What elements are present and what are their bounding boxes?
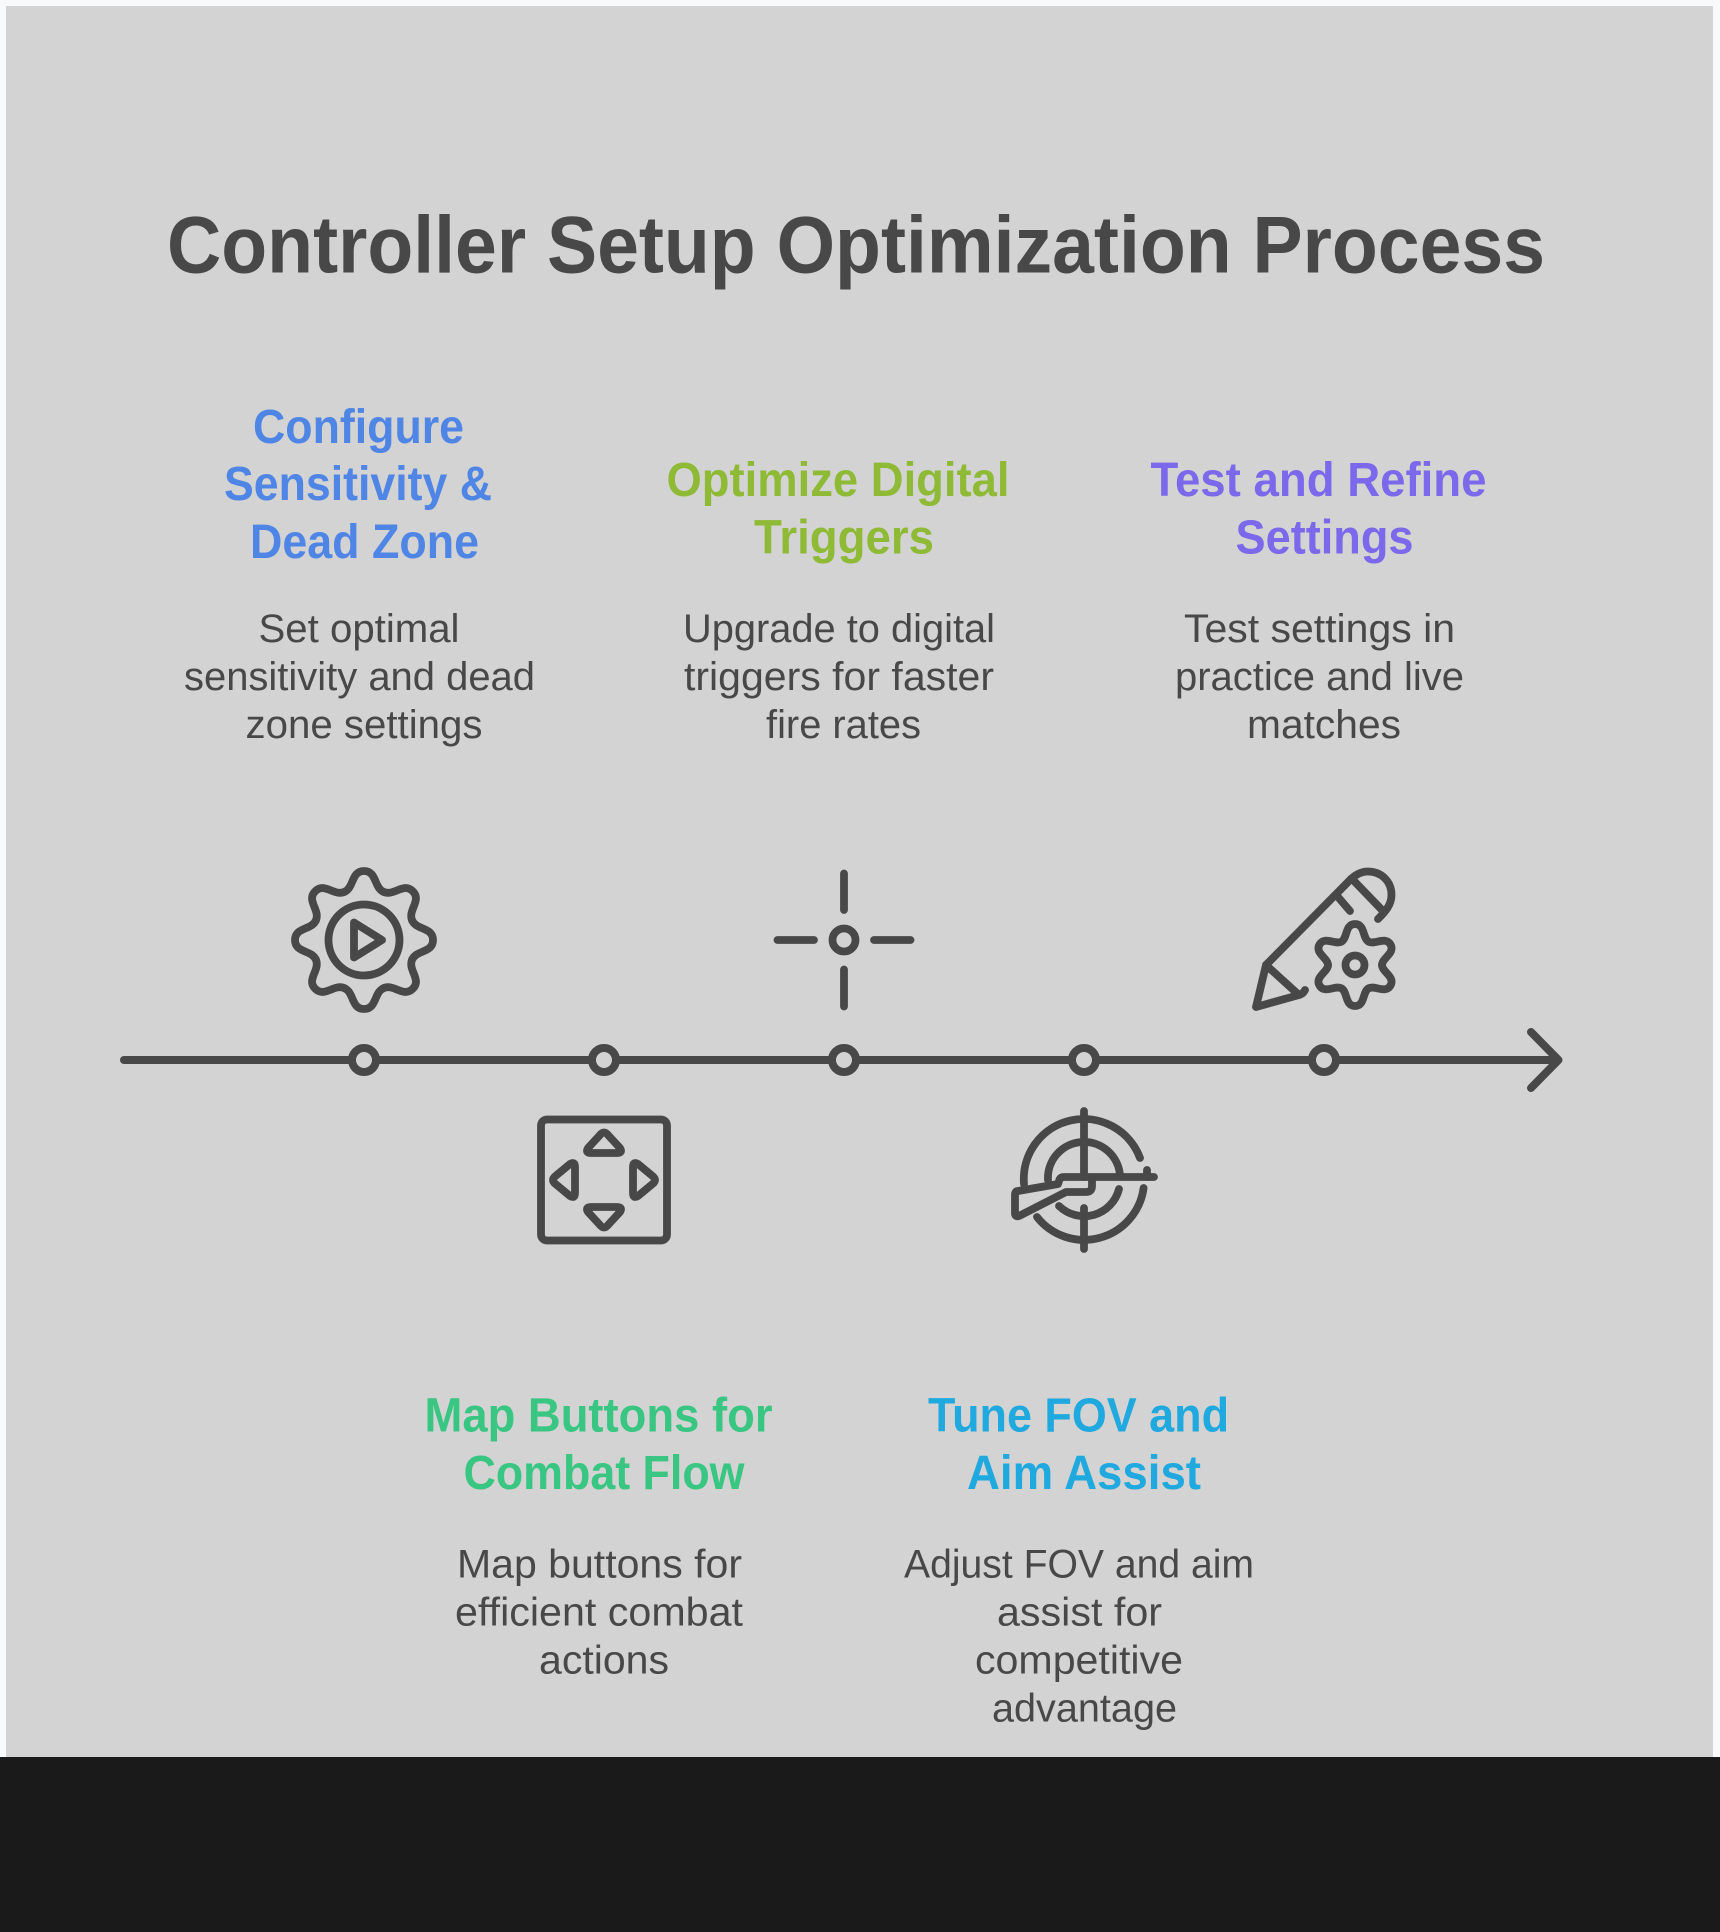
step 3: optimize digital triggers xyxy=(666,454,1010,747)
step 1 description xyxy=(184,607,535,747)
step 3 heading: Triggers xyxy=(754,512,934,564)
step 4 description: assist for xyxy=(997,1590,1162,1634)
arrow head xyxy=(1531,1032,1558,1088)
step 1 description: sensitivity and dead xyxy=(184,655,535,699)
step 5 description: Test settings in xyxy=(1184,607,1455,651)
icon: directional pad xyxy=(541,1120,667,1240)
step 2 heading: Map Buttons for xyxy=(424,1390,772,1442)
step 5 description: practice and live xyxy=(1175,655,1464,699)
step 1 description: Set optimal xyxy=(258,607,460,651)
step 2 heading xyxy=(424,1390,772,1500)
icon: gear with play button xyxy=(295,871,433,1009)
step 4 description: advantage xyxy=(992,1686,1177,1730)
step 5 description: matches xyxy=(1247,703,1401,747)
step 5 heading: Settings xyxy=(1236,512,1414,564)
step 4 heading: Aim Assist xyxy=(967,1447,1201,1500)
timeline arrow with five nodes xyxy=(124,1032,1558,1088)
step 4 description xyxy=(904,1542,1254,1730)
step 5 heading xyxy=(1150,454,1486,564)
icon: crosshair xyxy=(778,874,910,1006)
step 2: map buttons for combat flow xyxy=(424,1390,772,1682)
step 2 description: actions xyxy=(539,1638,669,1682)
step 2 description xyxy=(455,1542,743,1682)
step 4 description: competitive xyxy=(975,1638,1183,1682)
step 3 heading: Optimize Digital xyxy=(666,454,1010,507)
icon: pencil with gear xyxy=(1256,872,1397,1007)
step 1 heading: Sensitivity & xyxy=(224,458,492,511)
step 3 description: fire rates xyxy=(766,703,921,747)
step 3 description: triggers for faster xyxy=(684,655,994,699)
step 3 description xyxy=(683,607,995,747)
step 1: configure sensitivity and dead zone xyxy=(184,401,535,747)
step 2 description: Map buttons for xyxy=(457,1542,742,1586)
step 1 heading: Configure xyxy=(253,401,464,454)
step 4: tune fov and aim assist xyxy=(904,1390,1254,1730)
step 5 description xyxy=(1175,607,1464,747)
step 5 heading: Test and Refine xyxy=(1150,454,1486,507)
icon: target with rifle xyxy=(1015,1111,1154,1249)
step 3 description: Upgrade to digital xyxy=(683,607,995,651)
step 4 heading xyxy=(928,1390,1229,1500)
step 3 heading xyxy=(666,454,1010,564)
step 4 description: Adjust FOV and aim xyxy=(904,1542,1254,1586)
timeline line xyxy=(124,1056,1558,1064)
step 1 heading xyxy=(224,401,492,569)
step 1 heading: Dead Zone xyxy=(250,516,479,569)
footer: dark band xyxy=(0,1757,1720,1932)
title: Controller Setup Optimization Process xyxy=(167,200,1545,290)
step 1 description: zone settings xyxy=(246,703,482,747)
step 5: test and refine settings xyxy=(1150,454,1486,747)
timeline nodes xyxy=(352,1048,1336,1072)
step 2 heading: Combat Flow xyxy=(464,1447,745,1500)
step 2 description: efficient combat xyxy=(455,1590,743,1634)
step 4 heading: Tune FOV and xyxy=(928,1390,1229,1442)
